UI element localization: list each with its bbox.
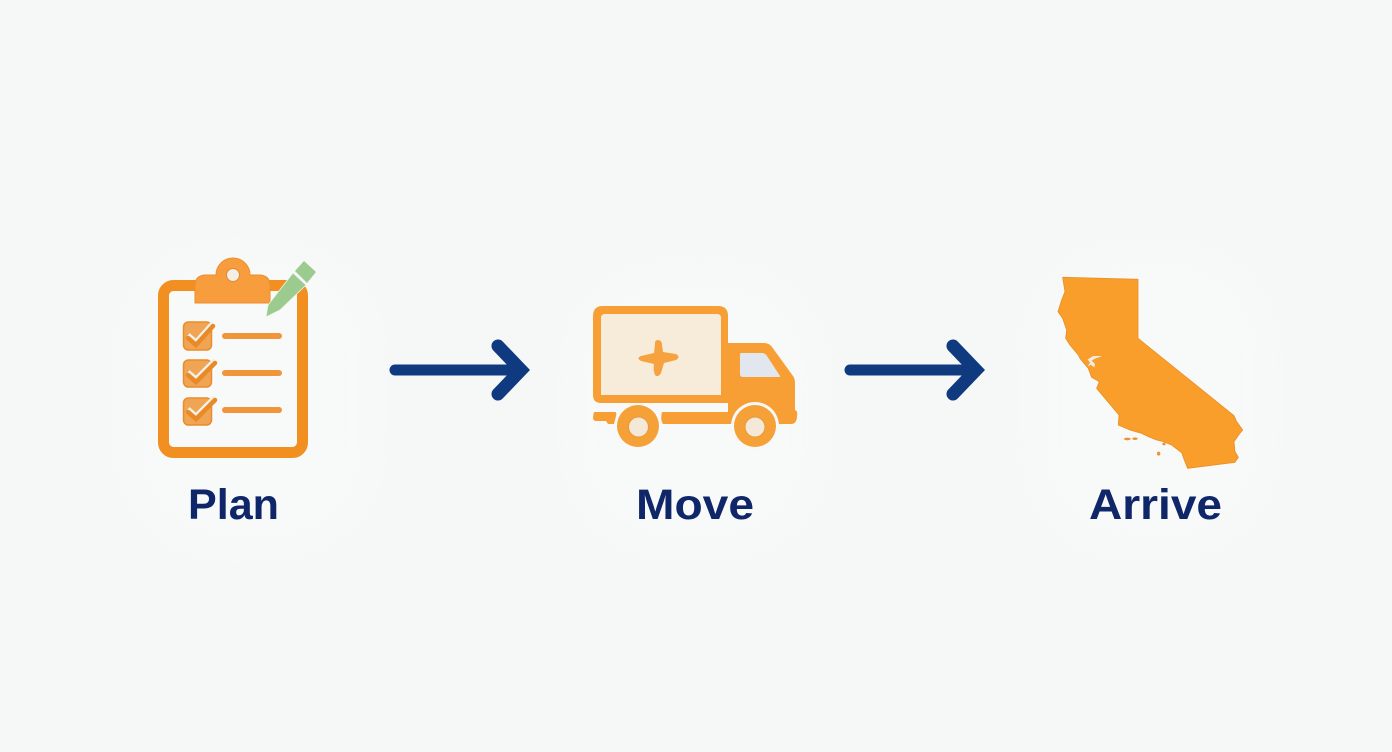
- icon: delivery truck: [593, 306, 797, 450]
- rear bumper: [593, 412, 616, 424]
- clip hole: [226, 268, 240, 282]
- cab window: [740, 353, 780, 377]
- Channel Islands: [1124, 437, 1166, 456]
- icon: clipboard with checklist: [164, 258, 316, 452]
- step: arrive: [1058, 277, 1243, 529]
- cargo star emblem: [638, 340, 678, 376]
- rear wheel: [617, 405, 659, 447]
- icon: California map: [1058, 277, 1243, 468]
- front wheel: [734, 405, 776, 447]
- arrow: plan to move: [395, 346, 522, 394]
- arrow: move to arrive: [850, 346, 977, 394]
- San Francisco bay: [1088, 356, 1102, 367]
- label: Move: Move: [636, 481, 754, 529]
- label: Arrive: Arrive: [1089, 481, 1222, 529]
- clipboard board: [164, 286, 302, 452]
- cargo stripe: [601, 395, 718, 403]
- front wheel gap: [731, 402, 779, 450]
- step: plan: [164, 258, 316, 529]
- checklist row 1: [184, 322, 282, 350]
- truck cargo box: [593, 306, 728, 403]
- clipboard clip: [195, 258, 270, 303]
- front hub: [745, 417, 765, 437]
- truck cab and chassis: [661, 343, 797, 424]
- label: Plan: Plan: [188, 481, 279, 529]
- checklist row 2: [184, 360, 282, 387]
- step: move: [593, 306, 797, 529]
- rear hub: [628, 417, 648, 437]
- checklist row 3: [184, 397, 282, 425]
- icon: green pencil: [266, 261, 316, 317]
- cargo box panel: [601, 314, 721, 395]
